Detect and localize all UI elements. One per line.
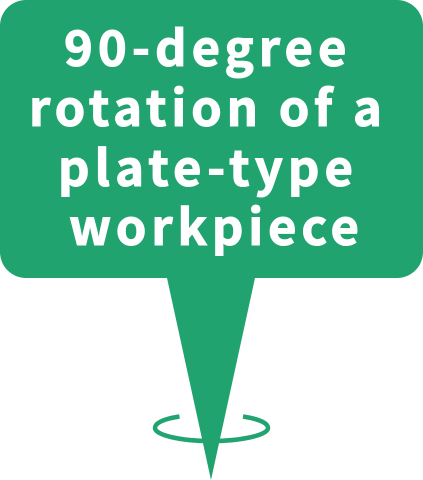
title text: rotation of a xyxy=(29,70,388,141)
title text xyxy=(29,10,388,260)
icon: rotation ring xyxy=(155,416,268,441)
title text: plate-type xyxy=(58,130,360,201)
title text: 90-degree xyxy=(64,10,353,81)
title text: workpiece xyxy=(69,189,366,260)
